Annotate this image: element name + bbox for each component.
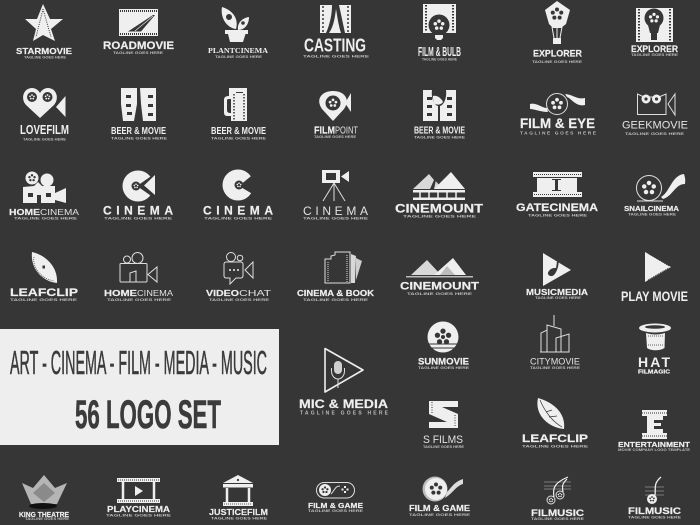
banner panel	[0, 329, 279, 445]
tagline: TAGLINE GOES HERE	[111, 136, 168, 140]
name: GATECINEMA	[516, 202, 598, 214]
logo: homecinema outline	[104, 252, 174, 302]
name: EXPLORER	[533, 48, 582, 58]
icon: mountains	[406, 258, 473, 278]
tagline: TAGLINE GOES HERE	[409, 513, 471, 517]
name: PLAYCINEMA	[107, 504, 170, 514]
name: EXPLORER	[631, 44, 678, 54]
tagline: TAGLINE GOES HERE	[104, 216, 173, 220]
logo: geekmovie	[622, 94, 688, 136]
logo: sunmovie	[418, 322, 470, 370]
icon: map pin reel	[319, 91, 351, 121]
logo: lovefilm	[20, 88, 69, 142]
icon: outline city	[540, 315, 569, 352]
tagline: TAGLINE GOES HERE	[628, 212, 677, 216]
tagline: FILMAGIC	[638, 370, 671, 376]
name: ROADMOVIE	[103, 40, 174, 52]
tagline: TAGLINE GOES HERE	[522, 444, 589, 448]
icon: film e	[642, 410, 667, 439]
logo: mic and media	[299, 348, 389, 416]
tagline: TAGLINE GOES HERE	[303, 298, 369, 302]
logo: entertainment	[618, 410, 691, 452]
logo: cinema c	[203, 170, 273, 220]
tagline: TAGLINE GOES HERE	[14, 216, 78, 220]
tagline: TAGLINE GOES HERE	[10, 298, 78, 302]
tagline: TAGLINE GOES HERE	[625, 132, 685, 136]
logo: play movie	[621, 252, 688, 304]
name: JUSTICEFILM	[209, 508, 268, 517]
icon: chat camera	[224, 252, 253, 284]
name: STARMOVIE	[16, 46, 72, 56]
icon: film star	[25, 4, 63, 41]
logo: film and game controller	[308, 482, 364, 513]
icon: plant pot	[222, 7, 249, 42]
name: BEER & MOVIE	[111, 125, 166, 137]
logo: musicmedia	[526, 253, 588, 300]
tagline: TAGLINE GOES HERE	[418, 366, 470, 370]
logo: snailcinema	[624, 174, 685, 216]
name: FILM	[314, 126, 335, 136]
name: CINEMA	[303, 204, 368, 218]
icon: film glasses	[121, 88, 156, 121]
logo: film and bulb	[418, 4, 461, 62]
icon: c reel triangle	[122, 170, 157, 202]
icon: play mic	[325, 348, 363, 392]
logo: citymovie	[530, 315, 581, 370]
logo: hat	[638, 324, 671, 376]
icon: c reel	[222, 170, 256, 200]
tagline: TAGLINE GOES HERE	[107, 298, 172, 302]
icon: film gate	[533, 172, 582, 197]
name: CINEMA	[103, 204, 173, 218]
tagline: TAGLINE GOES HERE	[211, 516, 268, 520]
icon: play note	[543, 253, 571, 286]
name light: CHAT	[239, 288, 271, 298]
logo: plantcinema	[208, 7, 269, 59]
name: CINEMA	[203, 204, 273, 218]
icon: game controller	[316, 482, 354, 498]
icon: leaf	[537, 398, 564, 429]
icon: reel sun	[428, 322, 458, 352]
name: SUNMOVIE	[418, 356, 469, 366]
icon: film s	[429, 401, 458, 428]
logo: cinemount film	[395, 172, 484, 218]
logo: explorer film	[631, 8, 679, 57]
icon: film courthouse	[223, 475, 253, 506]
logo: homecinema filled	[9, 172, 79, 220]
tagline: TAGLINE GOES HERE	[24, 56, 67, 60]
icon: film leaf	[32, 252, 57, 283]
name: CINEMOUNT	[400, 280, 479, 292]
name: CITYMOVIE	[530, 356, 580, 366]
icon: crown	[22, 475, 67, 509]
logo: roadmovie	[103, 9, 174, 55]
name: HAT	[638, 354, 670, 370]
logo: film and game reel	[409, 476, 471, 517]
tagline: TAGLINE GOES HERE	[113, 51, 164, 55]
logo: cinema and book	[297, 252, 375, 302]
icon: film mug	[224, 88, 247, 121]
icon: reel notes	[544, 477, 571, 504]
icon: reel note	[645, 477, 664, 504]
name light: CINEMA	[137, 289, 174, 298]
icon: film wine glass	[423, 90, 456, 121]
tagline: TAGLINE GOES HERE	[628, 516, 682, 520]
icon: mountain filmstrip	[413, 172, 465, 200]
logo: s films	[423, 401, 465, 449]
name: CINEMA & BOOK	[297, 288, 375, 298]
name: LEAFCLIP	[522, 433, 588, 445]
name: PLANTCINEMA	[208, 46, 269, 55]
logo: cinemount line	[400, 258, 479, 296]
tagline: TAGLINE GOES HERE	[423, 445, 465, 449]
logo: beer and movie mug	[211, 88, 267, 140]
tagline: TAGLINE GOES HERE	[215, 55, 263, 59]
name: KING THEATRE	[19, 512, 69, 519]
name: CASTING	[304, 36, 366, 56]
logo: gatecinema	[516, 172, 598, 218]
icon: reel ribbon	[530, 94, 585, 114]
name: CINEMOUNT	[395, 202, 484, 216]
name: MUSICMEDIA	[526, 288, 588, 297]
tagline: TAGLINE GOES HERE	[23, 138, 67, 142]
icon: reel tail game	[422, 476, 463, 502]
tagline: TAGLINE GOES HERE	[531, 517, 585, 521]
name: FILM & GAME	[308, 503, 363, 510]
icon: magic hat	[639, 324, 671, 350]
tagline: MOVIE COMPANY LOGO TEMPLATE	[618, 448, 691, 452]
tagline: TAGLINE GOES HERE	[528, 214, 588, 218]
tagline: TAGLINE GOES HERE	[300, 410, 389, 416]
tagline: TAGLINE GOES HERE	[303, 216, 369, 220]
icon: balloon reel	[545, 1, 570, 44]
logo: playcinema	[106, 478, 172, 518]
tagline: TAGLINE GOES HERE	[25, 517, 70, 521]
icon: reel tail	[636, 174, 685, 201]
tagline: TAGLINE GOES HERE	[407, 292, 473, 296]
name: S FILMS	[423, 434, 463, 446]
logo: cinema c camera	[103, 170, 173, 220]
name: FILMUSIC	[628, 506, 682, 516]
logo: filmpoint	[314, 91, 358, 139]
logo: videochat	[206, 252, 271, 302]
tagline: TAGLINE GOES HERE	[403, 214, 477, 218]
name: HOME	[104, 289, 138, 298]
name: BEER & MOVIE	[414, 126, 465, 136]
name: ENTERTAINMENT	[618, 440, 690, 449]
logo: filmusic double note	[531, 477, 585, 521]
tagline: TAGLINE GOES HERE	[211, 136, 267, 140]
icon: film book	[325, 252, 362, 283]
text: ART - CINEMA - FILM - MEDIA - MUSIC	[10, 344, 267, 381]
tagline: TAGLINE GOES HERE	[422, 58, 458, 62]
tagline: TAGLINE GOES HERE	[209, 298, 270, 302]
tagline: TAGLINE GOES HERE	[520, 130, 597, 136]
icon: outline camera glasses	[638, 94, 675, 115]
banner background	[0, 329, 279, 445]
tagline: TAGLINE GOES HERE	[204, 216, 273, 220]
name: VIDEO	[206, 288, 239, 298]
name: LOVEFILM	[20, 123, 69, 137]
name: FILM & GAME	[409, 503, 470, 513]
name: HOME	[9, 207, 40, 217]
logo: explorer balloon	[532, 1, 583, 64]
name light: POINT	[335, 126, 358, 136]
icon: tripod camera	[322, 170, 349, 201]
logo: leafclip	[522, 398, 589, 448]
tagline: TAGLINE GOES HERE	[532, 60, 583, 64]
icon: camera house	[23, 172, 66, 203]
tagline: TAGLINE GOES HERE	[414, 136, 466, 140]
name: FILM & EYE	[520, 116, 595, 131]
tagline: TAGLINE GOES HERE	[308, 509, 364, 513]
name: GEEKMOVIE	[622, 120, 688, 132]
tagline: TAGLINE GOES HERE	[303, 54, 370, 58]
icon: film play	[645, 252, 671, 282]
name: FILM & BULB	[418, 44, 461, 59]
logo: beer and movie glasses	[111, 88, 168, 140]
logo: king theatre	[19, 475, 70, 521]
tagline: TAGLINE GOES HERE	[314, 135, 357, 139]
name: FILMUSIC	[531, 508, 585, 518]
logo: starmovie	[16, 4, 72, 60]
tagline: TAGLINE GOES HERE	[631, 53, 679, 57]
icon: film bulb	[423, 4, 456, 40]
icon: outline camera door	[120, 252, 157, 282]
tagline: TAGLINE GOES HERE	[106, 514, 172, 518]
logo: film and eye	[520, 94, 597, 136]
logo: justicefilm	[209, 475, 268, 520]
name: MIC & MEDIA	[299, 397, 388, 411]
logo: leafclip film	[10, 252, 78, 302]
banner heading: 56 logo set: 56 LOGO SET	[75, 393, 221, 437]
logo: filmusic single note	[628, 477, 682, 520]
icon: film balloon	[636, 8, 673, 42]
icon: film play frame	[117, 478, 160, 503]
logo: cinema tripod	[303, 170, 369, 220]
icon: film curtain	[320, 5, 351, 33]
name: SNAILCINEMA	[624, 204, 680, 213]
logo: beer and movie wine	[414, 90, 466, 140]
name light: CINEMA	[40, 207, 79, 217]
name: BEER & MOVIE	[211, 125, 266, 137]
tagline: TAGLINE GOES HERE	[530, 366, 581, 370]
logo: casting	[303, 5, 370, 58]
icon: film road	[119, 9, 158, 36]
tagline: TAGLINE GOES HERE	[535, 296, 582, 300]
name: LEAFCLIP	[10, 287, 78, 299]
icon: heart camera	[23, 88, 66, 118]
